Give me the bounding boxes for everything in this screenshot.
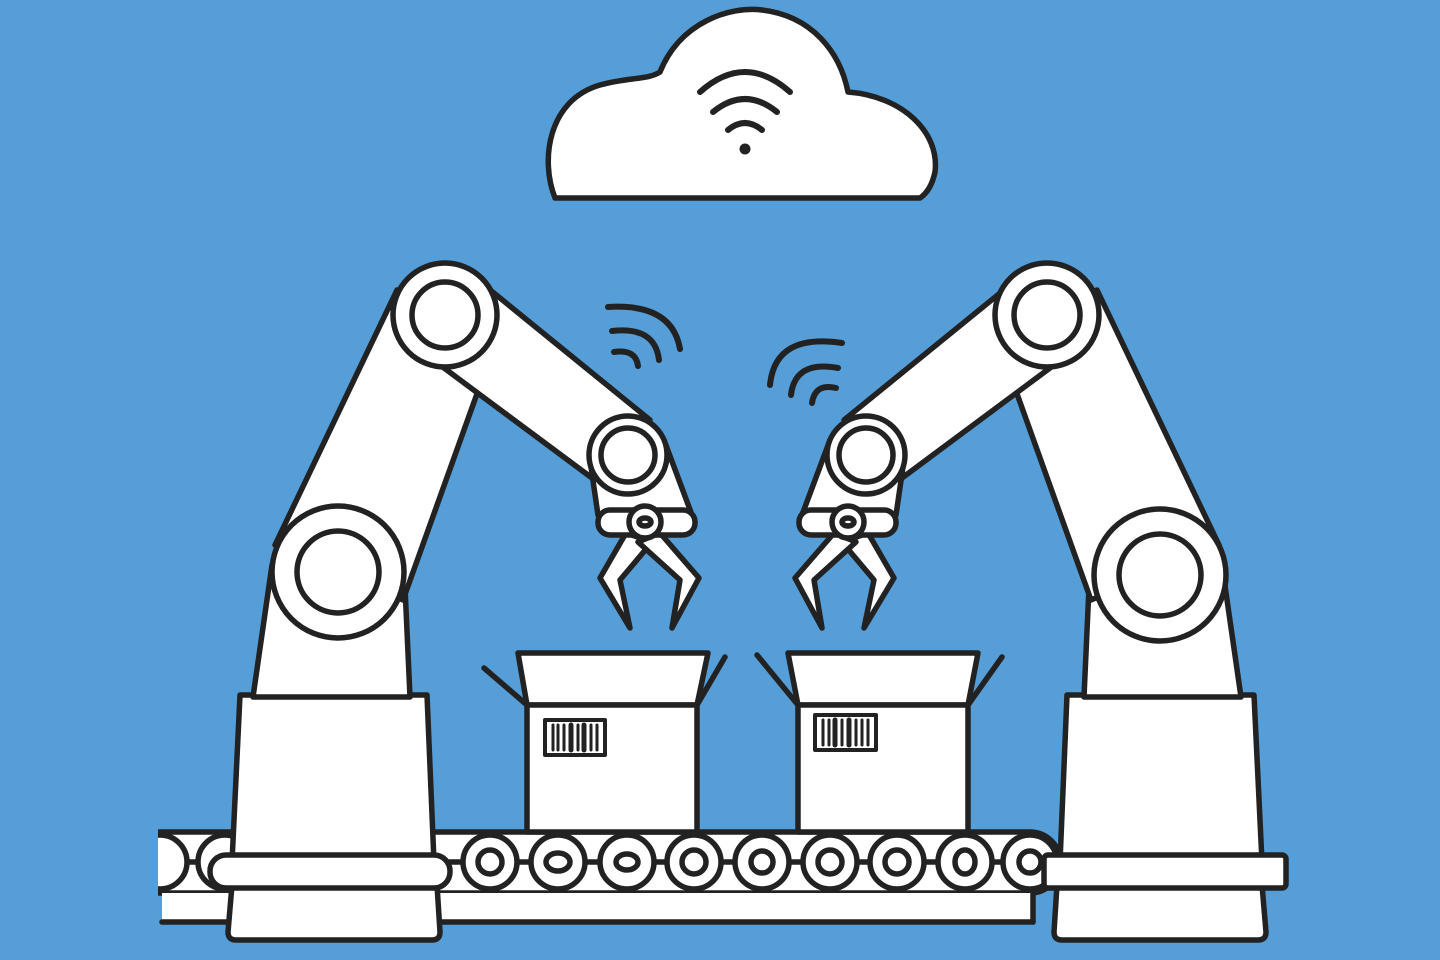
robot arm: left xyxy=(210,263,699,940)
lower column xyxy=(253,565,410,697)
signal: right xyxy=(770,341,842,403)
base lower xyxy=(228,885,440,940)
cloud with wifi xyxy=(548,9,935,198)
bar xyxy=(598,510,695,535)
base band xyxy=(210,855,450,888)
robot arm: right xyxy=(795,263,1286,940)
elbow joint xyxy=(272,506,404,638)
forearm xyxy=(440,272,650,478)
box: right xyxy=(757,653,1002,832)
fingers xyxy=(600,533,652,628)
box: left xyxy=(484,653,725,832)
base upper xyxy=(232,695,434,862)
signal: left xyxy=(608,307,680,366)
wrist xyxy=(589,416,667,494)
gripper body xyxy=(590,440,692,515)
shoulder joint xyxy=(393,263,497,367)
upper arm xyxy=(275,290,497,600)
conveyor belt xyxy=(100,815,1060,935)
